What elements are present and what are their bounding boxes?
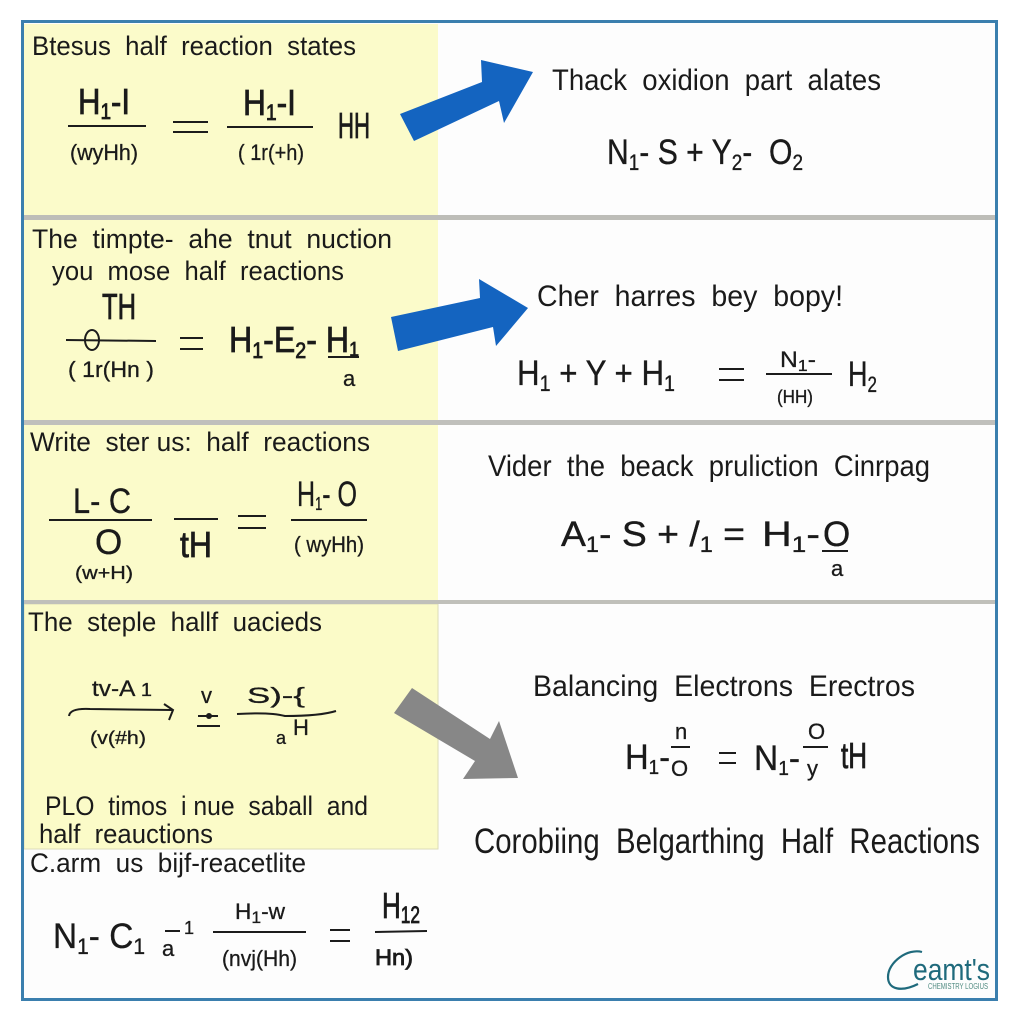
equation: row 2 right: - — [808, 347, 816, 372]
equation: row 2 right: H — [848, 355, 873, 394]
equation: row 5: - C — [89, 917, 133, 956]
equation: row 3 left: (w+H) — [75, 563, 133, 583]
equation: row 2 right: N — [780, 347, 796, 372]
equation: row 2 right: (HH) — [777, 387, 813, 407]
arrow: row 2 blue — [391, 279, 528, 351]
equation: row 1 right: N — [607, 133, 632, 172]
equation: row 2 left: 2 — [295, 338, 306, 363]
equation: row 1 left: -I — [277, 82, 296, 123]
row 3 left — [30, 427, 370, 583]
heading: row 2: The timpte- ahe tnut nuction — [32, 224, 392, 254]
equation: row 3 left: - O — [322, 475, 357, 514]
equation: row 1 right: 2 — [732, 150, 742, 175]
equation: row 1 left: HH — [338, 105, 370, 146]
equation: row 2 right: 1 — [540, 371, 551, 396]
equation: row 1 left: 1 — [266, 100, 277, 125]
equation: balancing electrons: tH — [841, 735, 867, 776]
equation: row 3 right: O — [823, 515, 850, 554]
equation: row 2 right: + Y + H — [551, 354, 664, 393]
equation: row 2 left: 1 — [252, 338, 263, 363]
heading: row 1 right: Thack oxidion part alates — [552, 64, 881, 97]
equation: row 5: H — [382, 885, 408, 926]
equation: row 1 left: 1 — [100, 99, 111, 124]
equation: row 2 right: 1 — [798, 358, 808, 375]
equation: row 5: 1 — [251, 908, 261, 927]
equation: row 4 left: tv-A 1 — [92, 676, 152, 701]
equation: row 4 left: a — [276, 728, 287, 748]
heading: row 2 right: Cher harres bey bopy! — [537, 280, 843, 313]
equation: row 5: 1 — [133, 934, 145, 959]
equation: balancing electrons: N — [754, 739, 779, 778]
equation: row 5: N — [53, 917, 78, 956]
equation: row 4 left: v — [201, 683, 212, 708]
equation: row 3 right: = — [713, 515, 745, 554]
equation: row 1 right: - O — [742, 133, 792, 172]
equation: row 2 left — [66, 286, 359, 391]
equation: row 1 right: 1 — [629, 150, 639, 175]
equation: row 2 right — [517, 347, 877, 407]
text block: row 4 note — [39, 791, 368, 849]
logo mark — [888, 951, 922, 989]
equation: row 1 left: -I — [111, 81, 130, 122]
heading: row 1: Btesus half reaction states — [32, 31, 356, 61]
equation: balancing electrons: 1 — [778, 758, 789, 780]
logo tagline: CHEMISTRY LOGIUS — [928, 982, 988, 991]
equation: row 4 left: H — [293, 715, 309, 740]
panel: yellow column — [24, 24, 438, 849]
equation: row 5: Hn) — [375, 945, 413, 970]
equation: row 3 left: 1 — [315, 494, 322, 514]
logo — [888, 951, 990, 991]
equation: balancing electrons — [625, 719, 867, 781]
equation: row 5: 12 — [401, 902, 420, 929]
equation: row 5: a — [162, 936, 175, 961]
equation: balancing electrons: 1 — [649, 757, 659, 779]
equation: row 4 left: (v(#h) — [90, 728, 146, 748]
equation: balancing electrons: - — [659, 738, 670, 777]
equation: row 2 left: TH — [102, 286, 136, 327]
equation: row 3 right: A — [561, 515, 584, 554]
heading: row 4: The steple hallf uacieds — [28, 607, 322, 637]
equation: row 3 left: O — [95, 523, 122, 562]
equation: row 3 right: 1 — [586, 532, 599, 557]
equation: row 3 right: H — [762, 515, 787, 554]
row 5 bottom left — [30, 848, 427, 971]
equation: row 3 left: H — [297, 475, 322, 514]
equation: row 3 right: - S + / — [599, 515, 700, 554]
equation: row 3 right: 1 — [700, 532, 713, 557]
equation: row 5: (nvj(Hh) — [222, 946, 297, 971]
equation: row 2 left: 1 — [349, 339, 359, 361]
equation: row 3 right: - — [806, 515, 820, 554]
equation: row 3 right: a — [831, 556, 844, 581]
equation: row 5 — [53, 885, 427, 971]
text block: row 4 note: half reauctions — [39, 819, 213, 849]
equation: row 2 left: - H — [306, 319, 349, 360]
equation: row 3 right: 1 — [792, 532, 806, 557]
equation: row 3 left: ( wyHh) — [294, 532, 364, 557]
row 2 left — [32, 224, 392, 391]
equation: balancing electrons: O — [671, 756, 688, 781]
equation: balancing electrons: n — [675, 719, 687, 744]
equation: row 2 right: 2 — [868, 372, 877, 397]
equation: balancing electrons: - — [789, 739, 800, 778]
logo wordmark: eamt's — [913, 952, 990, 987]
heading: row 2 — [32, 224, 392, 286]
heading: row 3 right: Vider the beack pruliction Cinrpag — [488, 450, 930, 483]
equation: row 2 right: 1 — [664, 371, 675, 396]
equation: row 5: -w — [261, 899, 285, 924]
text block: row 4 note: PLO timos i nue saball and — [45, 791, 368, 821]
equation: row 2 left: ( 1r(Hn ) — [68, 357, 154, 382]
equation: row 4 left: S)-{ — [247, 683, 305, 708]
row 1 left — [32, 31, 370, 165]
equation: row 5: 1 — [77, 934, 89, 959]
equation: row 2 right: H — [517, 354, 542, 393]
row 4 left — [28, 607, 368, 849]
equation: row 1 left: H — [78, 81, 104, 122]
arrow: row 4 grey — [394, 688, 518, 779]
arrow: row 1 blue — [400, 60, 533, 141]
heading: row 2: you mose half reactions — [52, 256, 344, 286]
equation: row 5: 1 — [184, 918, 194, 938]
equation: row 1 right: - S + Y — [639, 133, 732, 172]
heading: row 3: Write ster us: half reactions — [30, 427, 370, 457]
equation: balancing electrons: H — [625, 738, 650, 777]
equation: row 2 left: -E — [263, 319, 295, 360]
heading: row 5: C.arm us bijf-reacetlite — [30, 848, 306, 878]
equation: row 1 left: (wyHh) — [70, 140, 138, 165]
equation: balancing electrons: y — [807, 756, 818, 781]
equation: row 3 left: tH — [180, 524, 212, 565]
equation: row 3 left: L- C — [73, 482, 131, 521]
equation: row 1 right: 2 — [792, 150, 803, 175]
equation: row 5: H — [235, 899, 251, 924]
equation: row 4 left — [69, 676, 336, 748]
equation: balancing electrons: O — [808, 719, 825, 744]
equation: row 1 left: ( 1r(+h) — [238, 140, 304, 165]
heading: balancing electrons: Balancing Electrons Erectros — [533, 670, 915, 703]
equation: row 3 right — [561, 515, 850, 581]
equation: row 2 left: a — [343, 366, 356, 391]
equation: row 1 left — [68, 81, 370, 165]
equation: row 1 left: H — [243, 82, 269, 123]
equation: row 2 left: H — [229, 319, 255, 360]
equation: row 3 left — [49, 475, 367, 583]
